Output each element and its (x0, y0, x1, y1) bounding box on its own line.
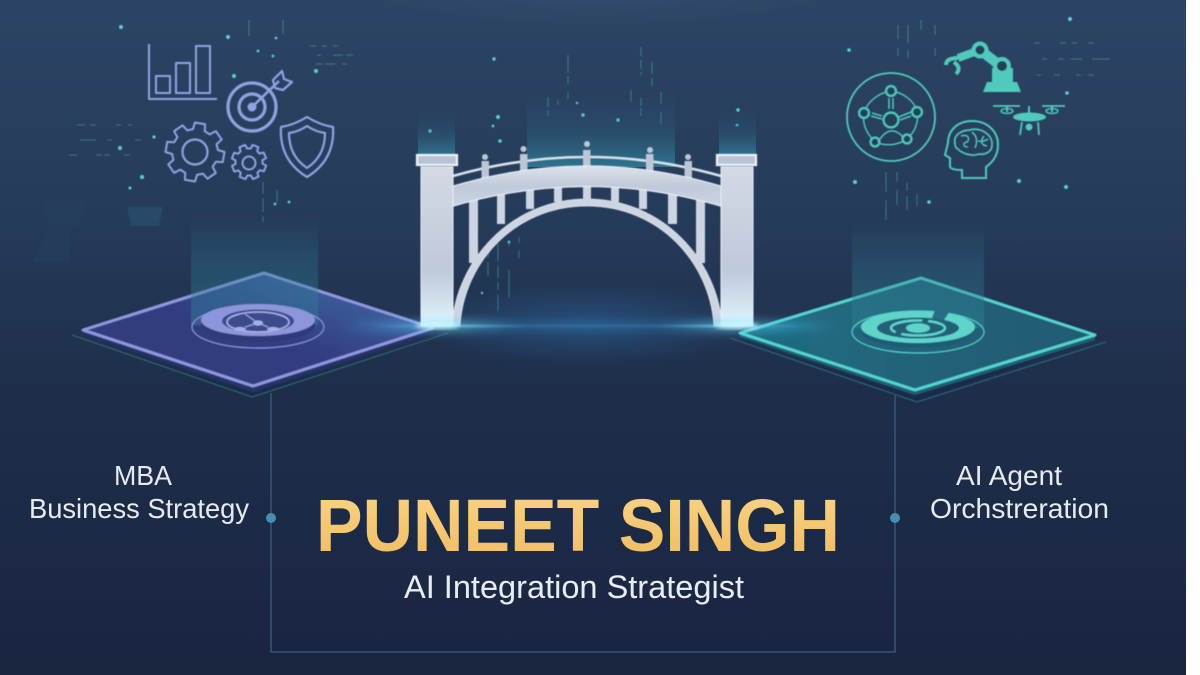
right pier (717, 155, 756, 326)
icon: robot arm (946, 44, 1021, 92)
arch and spandrel posts (452, 183, 722, 326)
light beams above the bridge (418, 114, 756, 167)
deck (450, 166, 724, 207)
left pier (417, 155, 457, 326)
label: MBA Business Strategy: Business Strategy (29, 493, 249, 524)
label: AI Agent Orchestration: Orchstreration (930, 493, 1109, 524)
icon: drone (993, 106, 1065, 135)
frame lines with connector dots (266, 393, 900, 652)
glow under bridge (460, 292, 715, 360)
panel: AI platform (730, 240, 1106, 403)
platform emblem: orchestration (852, 307, 984, 353)
icon: head with brain (945, 121, 998, 178)
icon group: AI agents (847, 44, 1065, 178)
platform emblem: business (192, 304, 324, 348)
icon: large gear (164, 120, 226, 184)
icon: target with arrow (228, 71, 292, 131)
title: PUNEET SINGH (316, 484, 840, 567)
subtitle: AI Integration Strategist (404, 569, 744, 605)
panel: MBA platform (72, 235, 448, 398)
railing (453, 141, 721, 181)
label: AI Agent Orchestration (931, 466, 1108, 518)
particles and data streaks (118, 17, 1072, 294)
label: MBA Business Strategy (31, 466, 249, 524)
icon: bar chart (149, 44, 217, 99)
bridge (417, 141, 756, 326)
icon: small gear (230, 143, 268, 181)
label: MBA Business Strategy: MBA (114, 460, 172, 491)
glowing horizon line (340, 322, 840, 330)
label: AI Agent Orchestration: AI Agent (956, 460, 1062, 491)
icon group: business strategy (149, 44, 333, 186)
icon: agent network (847, 73, 935, 161)
icon: shield (281, 117, 333, 177)
